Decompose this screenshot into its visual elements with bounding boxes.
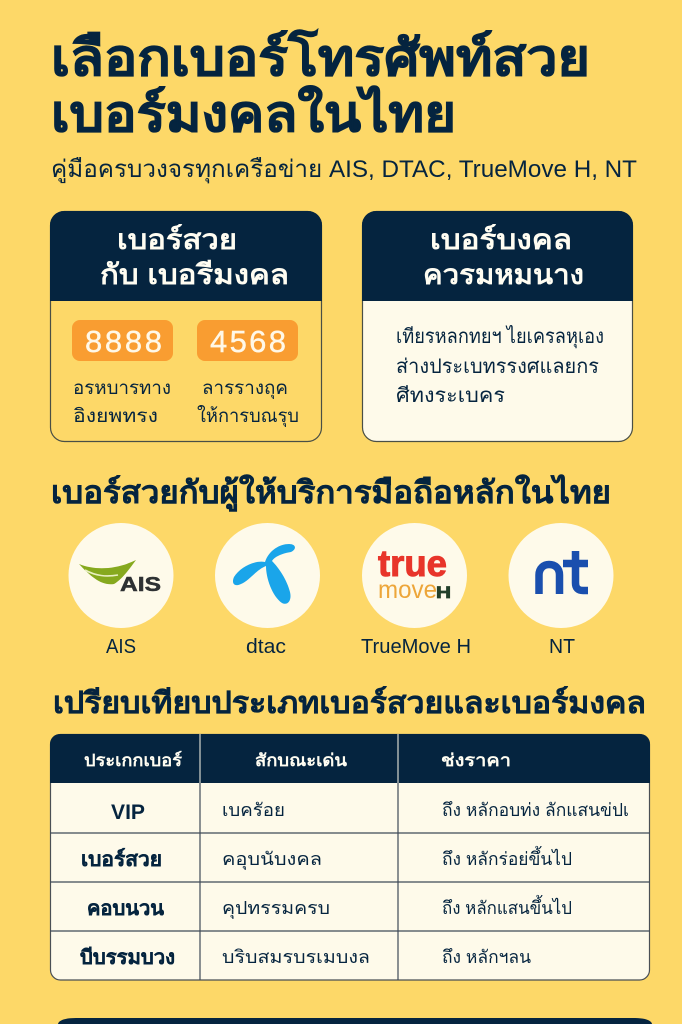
provider: NT (508, 523, 614, 658)
panel heading: right (423, 224, 584, 290)
panel: auspicious number meaning (362, 211, 633, 442)
provider: TrueMove H (361, 523, 471, 658)
panel body text: เทียรหลกทยฯ ไยเครลหุเอง (396, 325, 604, 349)
comparison table (50, 734, 650, 980)
heading: comparison: เปรียบเทียบประเภทเบอร์สวยและเบอร์มงคล (53, 686, 646, 720)
bottom banner (58, 1018, 652, 1024)
table row: auspicious: บีบรรมบวง (80, 946, 175, 969)
number badge: 4568 (197, 320, 298, 361)
panel header: left (50, 211, 322, 301)
title: เลือกเบอร์โทรศัพท์สวย (51, 28, 590, 86)
caption: 8888: อิงยพทรง (73, 406, 158, 427)
provider: dtac (215, 523, 320, 658)
icon: NT logo (539, 551, 588, 594)
icon: AIS logo: AIS (120, 574, 161, 596)
table row: sum: ถึง หลักแสนขึ้นไป (442, 895, 572, 918)
caption: 8888 (73, 378, 171, 427)
table header: ช่งราคา (441, 751, 511, 770)
icon: dtac logo (233, 544, 295, 604)
table row: auspicious (80, 946, 531, 969)
caption: 4568: ให้การบณรุบ (197, 405, 299, 428)
table header: สักบณะเด่น (255, 751, 347, 770)
panel heading: right: เบอร์บงคล (430, 224, 572, 255)
label: AIS: AIS (106, 636, 136, 658)
caption: 4568 (197, 378, 299, 428)
table header (50, 734, 650, 783)
table row: auspicious: ถึง หลักฯลน (442, 947, 531, 967)
panel heading: left (100, 224, 289, 290)
panel body text (396, 325, 604, 407)
table row: beautiful: เบอร์สวย (81, 848, 162, 871)
table row: VIP: VIP (111, 801, 145, 824)
panel body text: ศีทงระเบคร (396, 385, 505, 407)
panel heading: left: เบอร์สวย (117, 224, 237, 255)
panel header: right (362, 211, 633, 301)
icon: TrueMove H logo (378, 543, 451, 604)
provider: AIS (68, 523, 174, 658)
number badge: 8888 (72, 320, 173, 361)
panel heading: right: ควรมหมนาง (423, 259, 584, 290)
panel heading: left: กับ เบอรีมงคล (100, 259, 289, 290)
table row: auspicious: บริบสมรบรเมบงล (222, 947, 370, 967)
table header: ประเกกเบอร์ (84, 750, 183, 770)
label: dtac: dtac (246, 636, 286, 658)
table row: sum: คุปทรรมครบ (222, 898, 330, 919)
caption: 4568: ลารรางถุค (202, 378, 288, 400)
table row: VIP: เบครัอย (222, 800, 285, 820)
caption: 8888: อรหบารทาง (73, 378, 171, 399)
table row: VIP: ถึง หลักอบท่ง ลักแสนข่ปเ (442, 800, 629, 820)
icon: TrueMove H logo: H (436, 583, 451, 602)
title (51, 28, 590, 142)
heading: providers: เบอร์สวยกับผู้ให้บริการมือถือหลักในไทย (51, 474, 611, 512)
number badge: 8888: 8888 (85, 324, 162, 359)
table row: beautiful: คอุบนับงคล (222, 849, 322, 870)
table row: sum: คอบนวน (87, 898, 164, 920)
icon: TrueMove H logo: move (378, 576, 437, 604)
table row: sum (87, 895, 572, 920)
label: TrueMove H: TrueMove H (361, 636, 471, 658)
panel body text: ส่างประเบทรรงศแลยกร (396, 356, 599, 378)
number badge: 4568: 4568 (210, 324, 286, 359)
table row: beautiful (81, 846, 572, 871)
panel: beautiful and auspicious numbers (50, 211, 322, 442)
icon: TrueMove H logo: true (378, 543, 447, 584)
table row: VIP (111, 800, 629, 824)
title: เบอร์มงคลในไทย (51, 85, 456, 142)
label: NT: NT (549, 636, 575, 658)
table row: beautiful: ถึง หลักร่อย่ขึ้นไป (442, 846, 572, 869)
subtitle: คู่มือครบวงจรทุกเครือข่าย AIS, DTAC, TrueMove H, NT (51, 156, 637, 184)
